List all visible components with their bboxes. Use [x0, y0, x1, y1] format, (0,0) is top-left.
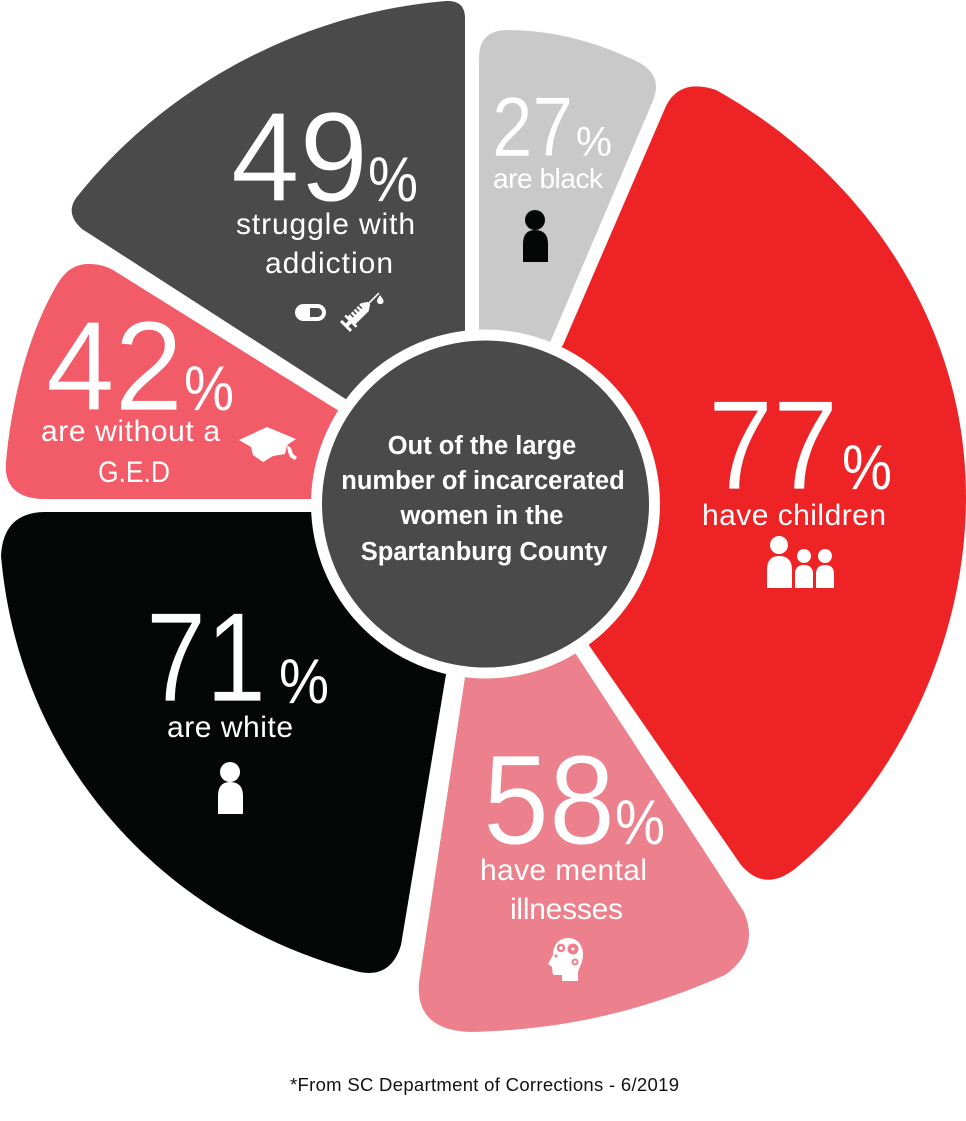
panel: 27% are black: [479, 30, 656, 366]
icon: syringe: [339, 287, 385, 333]
stat: 27%: %: [576, 118, 612, 165]
centre text: Spartanburg County: [361, 538, 608, 566]
label: have mental illnesses: have mental: [480, 854, 647, 887]
icon: head with gears: [548, 938, 583, 981]
stat: 49%: 49: [231, 86, 368, 228]
centre text: Out of the large: [388, 432, 576, 460]
icon: graduation cap: [239, 427, 297, 462]
stat: 42%: %: [184, 354, 234, 424]
stat: 49%: %: [368, 145, 418, 215]
label: are white: are white: [167, 711, 293, 744]
centre text: number of incarcerated: [341, 467, 625, 495]
label: have mental illnesses: illnesses: [510, 893, 623, 926]
centre text: women in the: [400, 502, 563, 530]
panel: 77% have children: [520, 86, 966, 880]
stat: 77%: 77: [708, 374, 838, 516]
label: struggle with addiction: struggle with: [236, 208, 415, 241]
stat: 42%: 42: [46, 295, 183, 437]
icon: pill: [295, 304, 326, 321]
label: are without a G.E.D: G.E.D: [98, 456, 170, 489]
panel: 71% are white: [1, 512, 473, 973]
stat: 58%: %: [615, 788, 665, 858]
label: are without a G.E.D: are without a: [41, 415, 220, 448]
centre circle: [311, 330, 660, 678]
stat: 58%: 58: [483, 729, 615, 871]
icon: family: [767, 536, 834, 588]
icon: person: [523, 210, 548, 262]
panel: 49% struggle with addiction: [72, 1, 465, 447]
panel: 42% are without a G.E.D: [6, 264, 400, 499]
label: struggle with addiction: addiction: [265, 247, 393, 280]
label: have mental illnesses: [480, 854, 647, 926]
stat: 27%: 27: [492, 80, 573, 174]
label: struggle with addiction: [236, 208, 415, 280]
label: are without a G.E.D: [41, 415, 220, 489]
icon: person: [218, 762, 243, 814]
footnote: *From SC Department of Corrections - 6/2019: [290, 1074, 679, 1095]
stat: 71%: %: [279, 647, 329, 717]
label: have children: have children: [702, 499, 886, 532]
stat: 77%: %: [842, 433, 892, 503]
panel: 58% have mental illnesses: [419, 553, 749, 1032]
stat: 71%: 71: [146, 586, 266, 728]
label: are black: are black: [493, 163, 604, 194]
